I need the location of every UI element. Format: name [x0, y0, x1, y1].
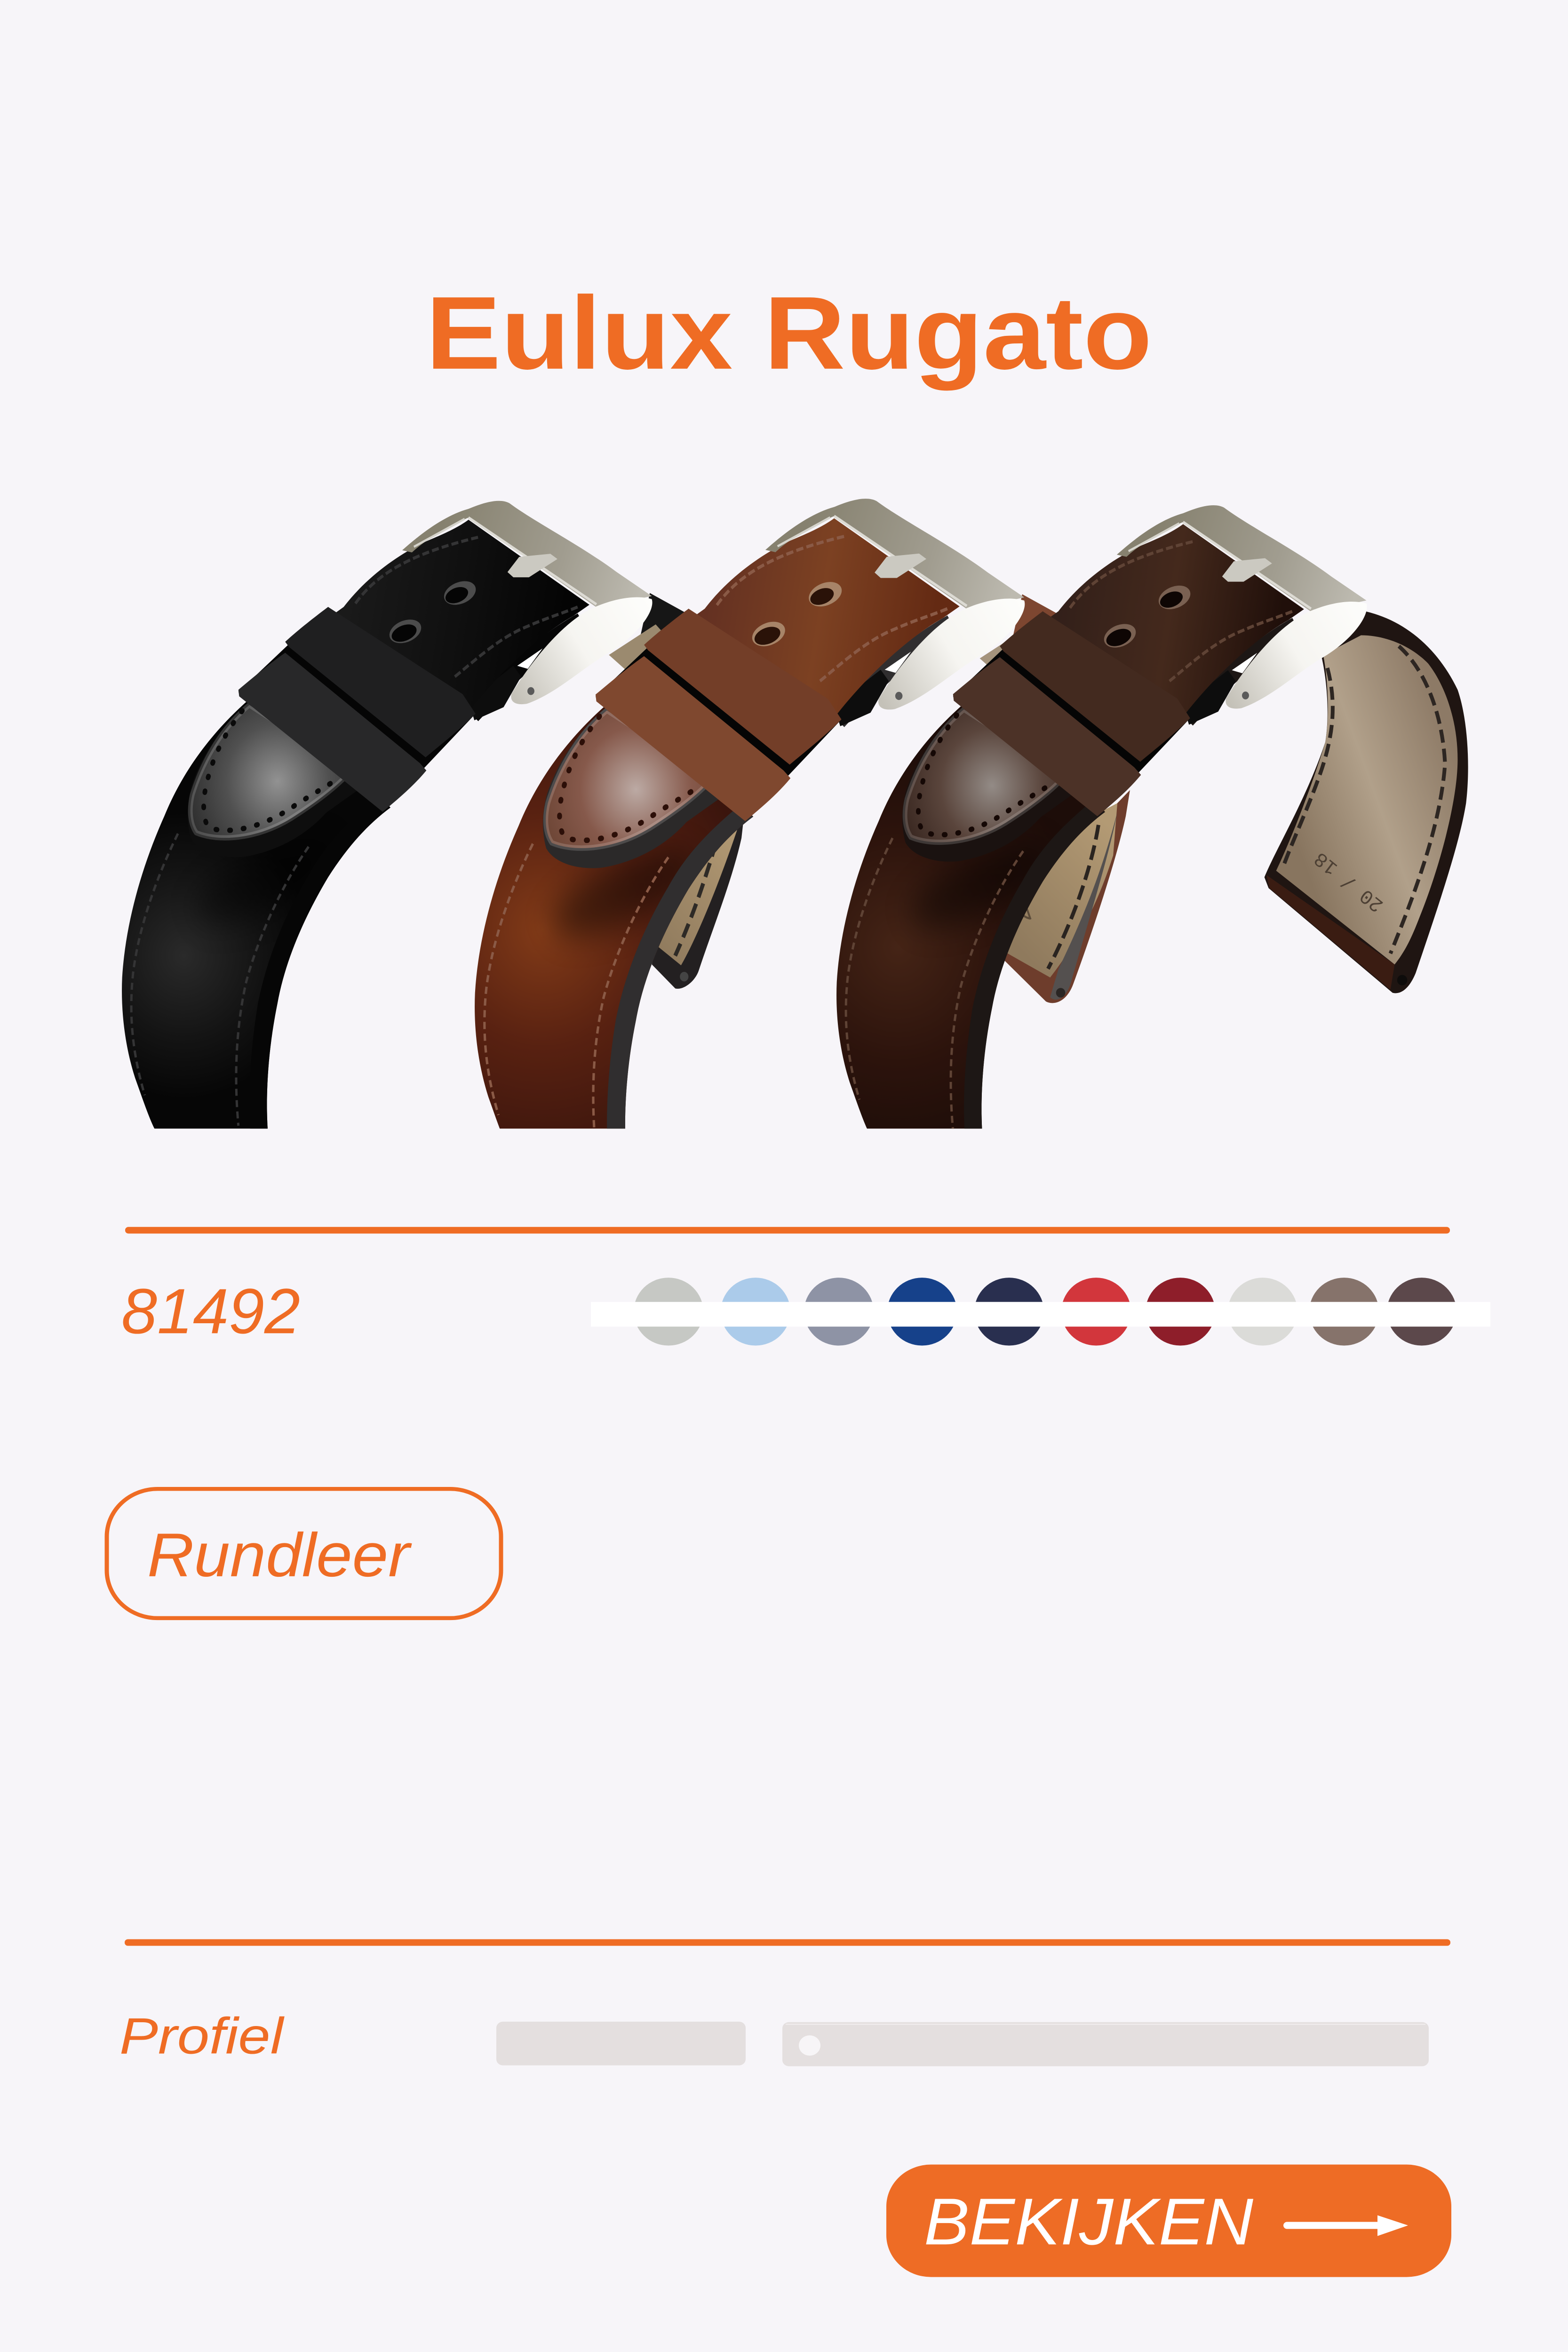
white strip across swatches [591, 1302, 1490, 1327]
strap tail: left underside [1002, 790, 1130, 1003]
button [886, 2165, 1451, 2277]
swatch: slate [804, 1278, 874, 1345]
material tag [107, 1489, 501, 1618]
strap: dark brown leather [836, 505, 1367, 1133]
swatch: burgundy [1146, 1278, 1215, 1345]
swatch: taupe [1309, 1278, 1379, 1345]
product image: three leather watch straps [122, 499, 1468, 1150]
profile label: Profiel [119, 2007, 285, 2064]
strap: brown leather [475, 499, 1061, 1150]
size mark: partial: 2 [1006, 903, 1039, 929]
divider: top [125, 1227, 1450, 1233]
strap: black leather [122, 501, 687, 1129]
strap: tan underside of the brown strap [652, 820, 743, 989]
colour swatches [634, 1278, 1457, 1345]
divider: bottom [125, 1939, 1450, 1946]
strap: underside of the dark brown strap with size mark [1002, 612, 1468, 1003]
title: Eulux Rugato [426, 276, 1152, 391]
button label: BEKIJKEN [924, 2185, 1254, 2258]
size mark: 20 / 18 [1310, 847, 1388, 917]
swatch: navy [974, 1278, 1044, 1345]
swatch: royal blue [887, 1278, 957, 1345]
swatch: pale grey [1228, 1278, 1297, 1345]
profile bar: long [782, 2022, 1429, 2066]
swatch: light blue [721, 1278, 790, 1345]
article number: 81492 [121, 1275, 300, 1347]
material label: Rundleer [147, 1520, 412, 1589]
swatch: light grey [634, 1278, 703, 1345]
strap tail: right underside [1265, 612, 1468, 993]
profile bar: short [496, 2022, 746, 2066]
swatch: dark taupe [1387, 1278, 1457, 1345]
swatch: red [1061, 1278, 1131, 1345]
profile marker dot [799, 2035, 820, 2056]
icon: arrow [1283, 2215, 1408, 2236]
